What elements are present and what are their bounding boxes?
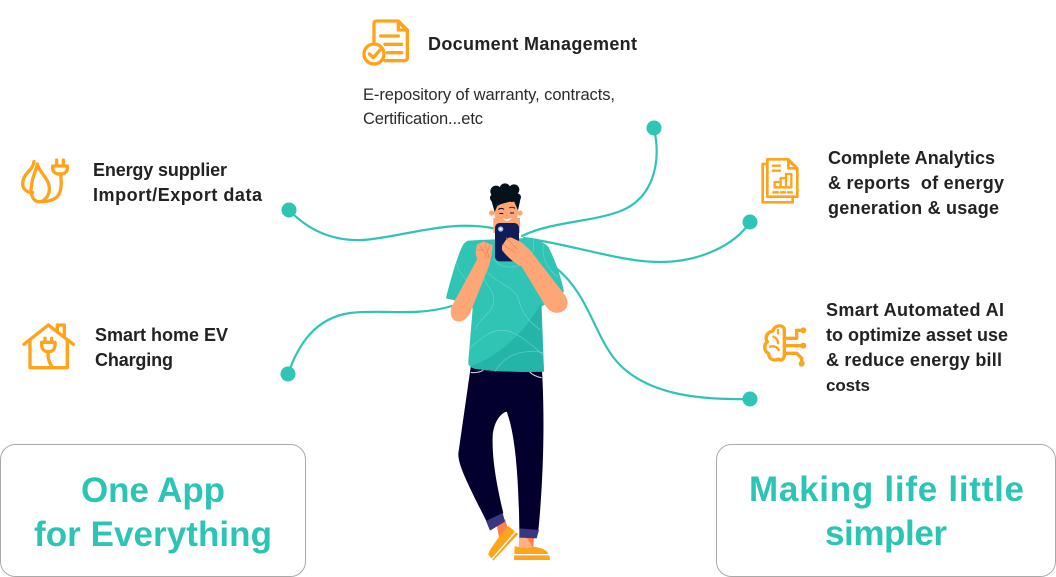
text: smart home EV bbox=[95, 325, 228, 370]
text: document description: E-repository of warranty, contracts, bbox=[363, 86, 615, 104]
text: analytics bbox=[828, 148, 1004, 218]
icon: brain circuit bbox=[765, 326, 806, 367]
connector: energy supplier bbox=[282, 202, 497, 240]
text: smart automated AI: Smart Automated AI bbox=[826, 300, 1004, 320]
text: smart automated AI bbox=[826, 300, 1008, 395]
text: smart home EV: Charging bbox=[95, 350, 173, 370]
panel: making life little simpler bbox=[716, 444, 1056, 576]
feature: document management bbox=[363, 21, 637, 128]
hair bbox=[490, 183, 521, 212]
text: smart automated AI: & reduce energy bill bbox=[826, 350, 1002, 370]
text: analytics: & reports of energy bbox=[828, 173, 1004, 193]
panel: making life little simpler: Making life little bbox=[749, 470, 1024, 509]
panel: making life little simpler: simpler bbox=[825, 514, 947, 553]
icon: report pages bbox=[763, 159, 797, 202]
t-shirt and arms bbox=[446, 238, 564, 372]
hand on phone bbox=[502, 238, 568, 313]
text: analytics: Complete Analytics bbox=[828, 148, 995, 168]
pants and shoes bbox=[458, 365, 550, 561]
text: smart home EV: Smart home EV bbox=[95, 325, 228, 345]
text: document description: Certification...etc bbox=[363, 110, 483, 128]
heading: document management: Document Management bbox=[428, 34, 637, 54]
text: energy supplier: Import/Export data bbox=[93, 185, 263, 205]
head and phone bbox=[489, 183, 523, 261]
icon: house with plug bbox=[24, 325, 73, 368]
feature: analytics bbox=[763, 148, 1004, 218]
panel: one app for everything bbox=[0, 444, 306, 576]
text: energy supplier: Energy supplier bbox=[93, 160, 227, 180]
icon: flame and plug bbox=[23, 160, 67, 202]
connector: document management bbox=[522, 120, 662, 236]
connector: analytics bbox=[524, 214, 758, 262]
text: smart automated AI: costs bbox=[826, 376, 870, 395]
feature: smart automated AI bbox=[765, 300, 1008, 395]
panel: one app for everything: One App bbox=[81, 471, 225, 510]
text: energy supplier bbox=[93, 160, 263, 205]
text: smart automated AI: to optimize asset use bbox=[826, 325, 1008, 345]
connector: smart AI bbox=[556, 268, 758, 406]
illustration: person holding phone bbox=[446, 183, 568, 561]
feature: smart home EV bbox=[24, 325, 228, 370]
feature: energy supplier bbox=[23, 160, 263, 205]
text: analytics: generation & usage bbox=[828, 198, 999, 218]
connector: home EV bbox=[280, 306, 452, 382]
panel: one app for everything: for Everything bbox=[34, 515, 272, 554]
icon: document with check bbox=[364, 21, 407, 64]
connector lines and dots bbox=[280, 120, 758, 406]
text: document description bbox=[363, 86, 615, 128]
